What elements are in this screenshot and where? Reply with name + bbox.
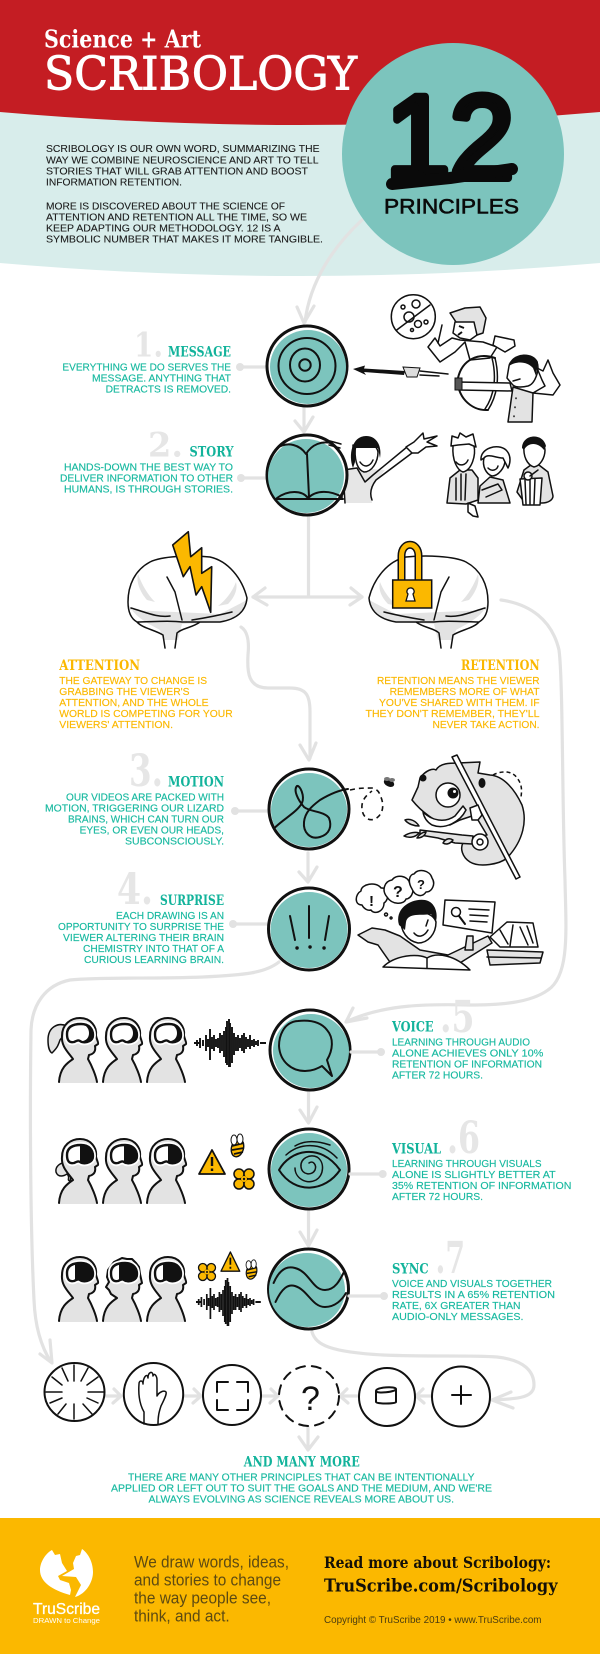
principle 3: motion text: EYES, OR EVEN OUR HEADS, (80, 826, 224, 837)
footer tagline (134, 1553, 289, 1626)
icon: audio waveform (194, 1019, 266, 1067)
principle 4: surprise text: CURIOUS LEARNING BRAIN. (84, 955, 224, 966)
icon: flower (198, 1264, 216, 1280)
icon: sunburst circle (44, 1363, 104, 1421)
intro text block: KEEP ADAPTING OUR METHODOLOGY. 12 IS A (46, 224, 281, 235)
illustration: archer and thinker (391, 295, 560, 422)
footer tagline: the way people see, (134, 1589, 271, 1608)
principle 4: surprise text: CHEMISTRY INTO THAT OF A (83, 944, 224, 955)
attention text: GRABBING THE VIEWER'S (59, 687, 190, 698)
icon: focus brackets circle (203, 1365, 261, 1425)
retention text: THEY DON'T REMEMBER, THEY'LL (366, 709, 540, 720)
icon: speech bubble (270, 1010, 350, 1090)
principle 4: surprise text: EACH DRAWING IS AN (116, 911, 224, 922)
principle 1: message text: MESSAGE (168, 345, 231, 361)
sync text: SYNC (392, 1261, 429, 1277)
connector: sync to row of circles (312, 1332, 534, 1408)
voice text: VOICE (391, 1020, 434, 1036)
principle 4: surprise text: OPPORTUNITY TO SURPRISE THE (58, 922, 224, 933)
principle 3: motion text: OUR VIDEOS ARE PACKED WITH (66, 793, 224, 804)
principle 1: message text: DETRACTS IS REMOVED. (106, 385, 231, 396)
attention text (58, 658, 233, 731)
and many more text: AND MANY MORE (243, 1455, 360, 1471)
principle 4: surprise text: SURPRISE (160, 893, 224, 909)
visual text: .6 (447, 1113, 480, 1164)
header: red banner (0, 0, 600, 130)
header: pale teal band (0, 112, 600, 276)
principle 4: surprise text (58, 865, 224, 966)
voice text: LEARNING THROUGH AUDIO (392, 1038, 530, 1049)
connector: story (237, 474, 267, 482)
principle 3: motion text: MOTION (168, 775, 224, 791)
icon: target (267, 326, 347, 406)
intro text block: SYMBOLIC NUMBER THAT MAKES IT MORE TANGIBLE. (46, 235, 323, 246)
connector: surprise (229, 920, 269, 928)
visual text: ALONE IS SLIGHTLY BETTER AT (392, 1170, 556, 1181)
badge: 12 principles: PRINCIPLES (384, 194, 519, 218)
sync text: .7 (436, 1233, 465, 1284)
footer logo (33, 1549, 100, 1625)
principle 3: motion text (45, 746, 224, 848)
retention text: REMEMBERS MORE OF WHAT (390, 687, 540, 698)
icon: waveform (196, 1278, 261, 1326)
icon: hand circle (124, 1363, 183, 1425)
intro text block: SCRIBOLOGY IS OUR OWN WORD, SUMMARIZING THE (46, 144, 320, 155)
connector: visual (350, 1170, 387, 1178)
visual text: LEARNING THROUGH VISUALS (392, 1159, 542, 1170)
and many more text (111, 1455, 492, 1506)
illustration: curious learner (356, 871, 543, 970)
connector: surprise to row of circles (30, 962, 279, 1363)
principle 1: message text (62, 326, 232, 396)
icon: plus circle (432, 1366, 490, 1426)
row 5: voice heads (48, 1018, 186, 1083)
arrow: from badge to principle 1 (297, 220, 362, 323)
footer call to action (324, 1553, 558, 1597)
title: SCRIBOLOGY: SCRIBOLOGY (44, 48, 358, 100)
badge: 12 principles: 12 (386, 72, 514, 204)
arrow: 6 to 7 (300, 1210, 317, 1246)
icon: flower (234, 1169, 254, 1189)
attention text: THE GATEWAY TO CHANGE IS (59, 676, 207, 687)
principle 2: story text: HUMANS, IS THROUGH STORIES. (64, 485, 233, 496)
sync text: AUDIO-ONLY MESSAGES. (392, 1312, 524, 1323)
principle 4: surprise text: 4. (117, 865, 153, 915)
icon: warning triangle (199, 1150, 225, 1174)
and many more text: ALWAYS EVOLVING AS SCIENCE REVEALS MORE ABOUT US. (148, 1495, 454, 1506)
connector: message (236, 363, 267, 371)
connector: voice (351, 1048, 385, 1056)
voice text: .5 (440, 992, 474, 1043)
sync text: RESULTS IN A 65% RETENTION (392, 1290, 555, 1301)
connector: retention to voice (346, 600, 566, 1022)
attention text: WORLD IS COMPETING FOR YOUR (59, 709, 233, 720)
voice text: AFTER 72 HOURS. (392, 1071, 483, 1082)
retention text: RETENTION MEANS THE VIEWER (377, 676, 540, 687)
principle 1: message text: 1. (134, 326, 163, 366)
attention text: ATTENTION (58, 658, 140, 674)
brain: attention (128, 556, 247, 648)
intro text block: STORIES THAT WILL GRAB ATTENTION AND BOOST (46, 166, 309, 177)
footer call to action: Read more about Scribology: (324, 1553, 551, 1572)
and many more text: APPLIED OR LEFT OUT TO SUIT THE GOALS AND THE MEDIUM, AND WE'RE (111, 1484, 492, 1495)
connector: attention to motion (241, 627, 316, 760)
row 6: visual heads (56, 1139, 186, 1204)
footer band (0, 1518, 600, 1654)
footer call to action: TruScribe.com/Scribology (324, 1576, 558, 1597)
attention text: ATTENTION, AND THE WHOLE (59, 698, 209, 709)
icon: sine waves (268, 1249, 348, 1329)
illustration: curious learner: ! (369, 893, 374, 910)
icon: eye (269, 1129, 349, 1209)
footer tagline: We draw words, ideas, (134, 1553, 289, 1572)
connector: motion (231, 807, 269, 815)
brain: retention (369, 556, 488, 648)
intro text block: MORE IS DISCOVERED ABOUT THE SCIENCE OF (46, 201, 285, 212)
principle 2: story text: 2. (148, 426, 183, 466)
row of more principles: arrows (106, 1389, 431, 1450)
retention text: RETENTION (461, 658, 540, 674)
sync text (392, 1233, 555, 1323)
intro text block (46, 144, 323, 246)
visual text: AFTER 72 HOURS. (392, 1192, 483, 1203)
arrow: 3 to 4 (299, 853, 317, 882)
attention text: VIEWERS' ATTENTION. (59, 720, 173, 731)
principle 1: message text: EVERYTHING WE DO SERVES THE (62, 363, 231, 374)
principle 3: motion text: 3. (129, 746, 163, 797)
visual text (391, 1113, 571, 1203)
connector: sync (349, 1292, 388, 1300)
arrow: 1 to 2 (295, 406, 313, 432)
principle 3: motion text: SUBCONSCIOUSLY. (125, 837, 224, 848)
principle 4: surprise text: VIEWER ALTERING THEIR BRAIN (63, 933, 224, 944)
title: Science + Art: Science + Art (44, 24, 201, 54)
footer tagline: think, and act. (134, 1607, 230, 1626)
drawing: fly with dashed path (350, 777, 395, 820)
icon: cylinder circle (359, 1368, 415, 1426)
illustration: curious learner: ? (417, 877, 425, 892)
and many more text: THERE ARE MANY OTHER PRINCIPLES THAT CAN BE INTENTIONALLY (128, 1473, 475, 1484)
principle 3: motion text: BRAINS, WHICH CAN TURN OUR (68, 815, 224, 826)
footer logo: DRAWN to Change (33, 1616, 100, 1625)
icon: open book (267, 435, 347, 515)
icon: motion squiggle (269, 769, 349, 849)
intro text block: INFORMATION RETENTION. (46, 177, 182, 188)
visual text: 35% RETENTION OF INFORMATION (392, 1181, 571, 1192)
connector: story to brains (253, 515, 362, 605)
principle 1: message text: MESSAGE. ANYTHING THAT (92, 374, 232, 385)
footer tagline: and stories to change (134, 1571, 281, 1590)
intro text block: ATTENTION AND RETENTION ALL THE TIME, SO WE (46, 213, 307, 224)
voice text (391, 992, 543, 1082)
illustration: woman presenting (343, 433, 437, 503)
arrow: 5 to 6 (300, 1090, 317, 1123)
intro text block: WAY WE COMBINE NEUROSCIENCE AND ART TO TELL (46, 155, 319, 166)
principle 2: story text: STORY (190, 445, 234, 461)
footer logo: TruScribe (33, 1601, 100, 1618)
principle 2: story text: DELIVER INFORMATION TO OTHER (60, 474, 233, 485)
visual text: VISUAL (391, 1141, 441, 1157)
icon: exclamation marks (268, 888, 350, 970)
illustration: chameleon on branch (404, 755, 524, 879)
icon: question mark dashed circle: ? (301, 1380, 320, 1418)
icon: bee (245, 1260, 258, 1280)
row 7: sync heads (59, 1257, 186, 1322)
principle 2: story text: HANDS-DOWN THE BEST WAY TO (64, 463, 233, 474)
badge: 12 principles (342, 43, 564, 265)
icon: warning triangle (221, 1252, 240, 1271)
sync text: RATE, 6X GREATER THAN (392, 1301, 520, 1312)
icon: lightning bolt (173, 532, 212, 612)
illustration: curious learner: ? (393, 884, 403, 901)
voice text: ALONE ACHIEVES ONLY 10% (392, 1049, 543, 1060)
footer copyright: Copyright © TruScribe 2019 • www.TruScribe.com (324, 1614, 542, 1626)
icon: question mark dashed circle (279, 1366, 339, 1426)
principle 2: story text (60, 426, 234, 496)
retention text: NEVER TAKE ACTION. (432, 720, 540, 731)
voice text: RETENTION OF INFORMATION (392, 1060, 542, 1071)
principle 3: motion text: MOTION, TRIGGERING OUR LIZARD (45, 804, 224, 815)
sync text: VOICE AND VISUALS TOGETHER (392, 1279, 552, 1290)
illustration: audience (447, 433, 553, 517)
icon: bee (229, 1134, 246, 1158)
arrow drawing: flying arrow (353, 366, 448, 377)
retention text: YOU'VE SHARED WITH THEM. IF (379, 698, 540, 709)
retention text (366, 658, 540, 731)
icon: padlock (393, 545, 432, 608)
